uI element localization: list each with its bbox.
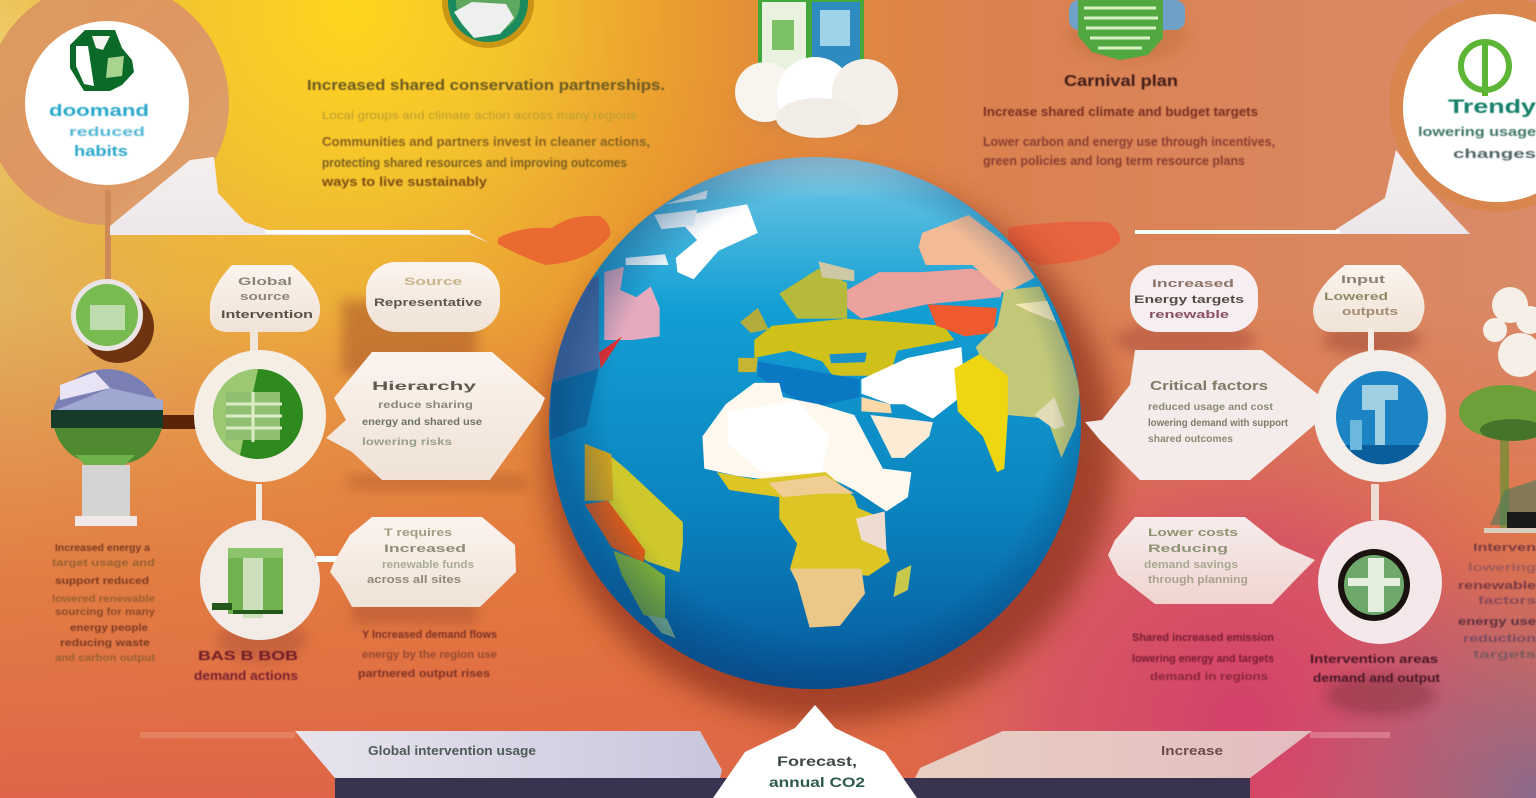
text block: left column: target usage and xyxy=(52,558,155,569)
text block: top right: Carnival plan xyxy=(1064,73,1178,90)
text block: left column: lowered renewable xyxy=(52,594,155,605)
hex bubble: lower right: Reducing xyxy=(1148,543,1228,555)
text block: left column: reducing waste xyxy=(60,638,151,649)
hex bubble: right: shared outcomes xyxy=(1148,434,1233,445)
landmass: East Asia xyxy=(976,286,1080,458)
banner: bottom left: Global intervention usage xyxy=(368,743,536,758)
chip bubble: right large: Energy targets xyxy=(1134,294,1244,306)
caption under gift node: demand actions xyxy=(194,668,298,683)
landmass: Eurasia band xyxy=(754,319,954,376)
badge label: lowering usage xyxy=(1418,124,1536,139)
icon: green recycling shirt xyxy=(70,30,134,91)
connector: node to bubble xyxy=(316,556,342,562)
text block: top right: Lower carbon and energy use through incentives, xyxy=(983,134,1275,149)
hex bubble: right: Critical factors xyxy=(1150,378,1268,393)
caption under dark ring: demand and output xyxy=(1313,671,1440,685)
orange cloud right xyxy=(1008,222,1120,265)
text block: top left: Increased shared conservation partnerships. xyxy=(307,77,665,94)
text block: far right xyxy=(1458,542,1536,661)
icon: green tree outline xyxy=(1461,40,1509,96)
landscape circle on stand xyxy=(51,369,198,526)
small green circle xyxy=(71,279,154,363)
badge label: Trendy xyxy=(1448,97,1536,118)
landmass: Europe north xyxy=(779,269,847,319)
globe xyxy=(540,157,1115,722)
hex bubble: lower left: Increased xyxy=(384,543,466,555)
continents xyxy=(540,190,1080,638)
white callout wedge left xyxy=(110,157,490,243)
circle node: dark ring xyxy=(1318,520,1442,644)
white rule right xyxy=(1135,230,1340,234)
text block: left column: support reduced xyxy=(55,576,149,587)
chip bubble: right small xyxy=(1313,265,1424,355)
hex bubble: lower left xyxy=(330,517,516,624)
text block: top left xyxy=(307,77,665,189)
chip bubble: left small: source xyxy=(240,291,290,303)
landmass: Mediterranean xyxy=(758,361,860,408)
text block: top right xyxy=(983,73,1275,168)
white callout wedge right xyxy=(1133,150,1470,234)
badge label: reduced xyxy=(69,124,145,139)
chip bubble: right small: Lowered xyxy=(1324,291,1388,303)
badge label: doomand xyxy=(49,101,149,120)
top right badge xyxy=(1133,0,1536,234)
caption: lower right text xyxy=(1132,632,1274,683)
caption under gift node: BAS B BOB xyxy=(198,648,298,663)
hex bubble: right xyxy=(1085,350,1320,480)
connector stem xyxy=(1368,328,1374,352)
text block: left column: Increased energy a xyxy=(55,543,150,554)
center badge xyxy=(713,705,917,798)
hex bubble: lower right: through planning xyxy=(1148,574,1248,586)
text block: left column: sourcing for many xyxy=(55,607,155,618)
hex bubble: left xyxy=(326,352,545,490)
banner: bottom left xyxy=(295,731,722,778)
caption under gift node xyxy=(194,648,298,683)
landmass: Arabia xyxy=(870,415,933,458)
hex bubble: left: reduce sharing xyxy=(378,400,473,411)
text block: left column: energy people xyxy=(70,623,148,634)
landmass: Russia xyxy=(847,269,1004,319)
circle node: blue xyxy=(1314,350,1446,482)
chip bubble: left large: Representative xyxy=(374,297,482,309)
banner: bottom right: Increase xyxy=(1161,743,1223,758)
chip bubble: left small: Global xyxy=(238,276,292,288)
hex bubble: lower right: Lower costs xyxy=(1148,527,1238,539)
center badge: Forecast, xyxy=(777,753,857,769)
text block: left column xyxy=(52,543,156,664)
chip bubble: left large xyxy=(342,262,500,375)
top icon: right striped xyxy=(1068,0,1188,61)
text block: far right: lowering xyxy=(1468,562,1536,574)
center badge: annual CO2 xyxy=(769,774,865,790)
landmass: India xyxy=(954,354,1008,472)
caption under dark ring xyxy=(1310,652,1440,715)
cloud xyxy=(735,57,898,138)
chip bubble: left small xyxy=(210,265,320,332)
tree illustration xyxy=(1459,287,1536,533)
landmass: South America xyxy=(604,451,683,572)
connector stem xyxy=(256,484,262,520)
text block: far right: targets xyxy=(1473,649,1536,661)
landmass: Central Africa xyxy=(717,472,890,576)
badge disc xyxy=(25,21,189,185)
dark base strip xyxy=(335,778,1250,798)
connector: left badge to small circle xyxy=(105,190,111,280)
text block: far right: factors xyxy=(1478,595,1536,607)
hex bubble: lower left: across all sites xyxy=(367,574,461,586)
hex bubble: right: reduced usage and cost xyxy=(1148,402,1274,413)
hex bubble: lower left: T requires xyxy=(384,527,452,539)
connector stem xyxy=(1371,484,1379,520)
chip bubble: right large: renewable xyxy=(1149,309,1229,321)
caption under dark ring: Intervention areas xyxy=(1310,652,1438,666)
chip bubble: right small: Input xyxy=(1341,274,1386,286)
caption: lower right text: lowering energy and targets xyxy=(1132,653,1274,665)
landmass: North America xyxy=(604,267,660,340)
caption: lower left text: partnered output rises xyxy=(358,668,490,680)
badge disc xyxy=(1403,14,1536,202)
caption: lower left text: Y Increased demand flows xyxy=(362,629,497,641)
chip bubble: right small: outputs xyxy=(1342,306,1398,318)
caption: lower right text: Shared increased emission xyxy=(1132,632,1274,644)
text block: top right: green policies and long term resource plans xyxy=(983,153,1245,168)
circle node: green gift xyxy=(200,520,320,662)
landmass: Arctic islands xyxy=(626,190,708,265)
hex bubble: left: energy and shared use xyxy=(362,417,482,428)
hex bubble: right: lowering demand with support xyxy=(1148,418,1289,429)
caption: lower left text xyxy=(358,629,497,680)
badge label xyxy=(49,101,149,160)
text block: far right: energy use xyxy=(1458,616,1536,628)
badge label: changes xyxy=(1453,146,1536,161)
chip bubble: left large: Source xyxy=(404,276,462,288)
circle node: green grid xyxy=(194,350,326,482)
landmass: North Africa xyxy=(702,383,911,511)
badge label: habits xyxy=(74,143,128,160)
text block: top left: Communities and partners invest in cleaner actions, xyxy=(322,134,650,149)
top left badge xyxy=(0,0,490,280)
hex bubble: lower right xyxy=(1108,517,1315,604)
text block: top left: Local groups and climate action across many regions xyxy=(322,110,638,122)
landmass: Greenland xyxy=(676,204,758,279)
text block: top right: Increase shared climate and budget targets xyxy=(983,104,1258,119)
text block: top left: ways to live sustainably xyxy=(321,174,488,189)
chip bubble: left small: Intervention xyxy=(221,309,313,321)
text block: left column: and carbon output xyxy=(55,653,156,664)
connector stem xyxy=(250,330,258,352)
smoke xyxy=(1483,287,1536,377)
top icon: card on cloud xyxy=(735,0,902,138)
caption: lower left text: energy by the region use xyxy=(362,649,497,661)
chip bubble: right large xyxy=(1115,265,1258,360)
chip bubble: right large: Increased xyxy=(1152,278,1234,290)
text block: top left: protecting shared resources and improving outcomes xyxy=(322,155,627,170)
hex bubble: lower right: demand savings xyxy=(1144,559,1238,571)
landmass: Middle East xyxy=(861,347,965,419)
orange cloud left xyxy=(498,216,610,265)
white rule left xyxy=(265,230,470,234)
top icon: left xyxy=(442,0,534,48)
text block: far right: reduction xyxy=(1463,633,1536,645)
hex bubble: left: lowering risks xyxy=(362,437,453,448)
hex bubble: lower left: renewable funds xyxy=(382,559,474,571)
landmass: Southern Africa xyxy=(790,569,865,627)
badge label xyxy=(1418,97,1536,161)
caption: lower right text: demand in regions xyxy=(1150,671,1268,683)
banner: bottom right xyxy=(915,731,1312,778)
hex bubble: left: Hierarchy xyxy=(372,379,477,393)
text block: far right: renewable xyxy=(1458,580,1536,592)
text block: far right: Interven xyxy=(1473,542,1536,554)
